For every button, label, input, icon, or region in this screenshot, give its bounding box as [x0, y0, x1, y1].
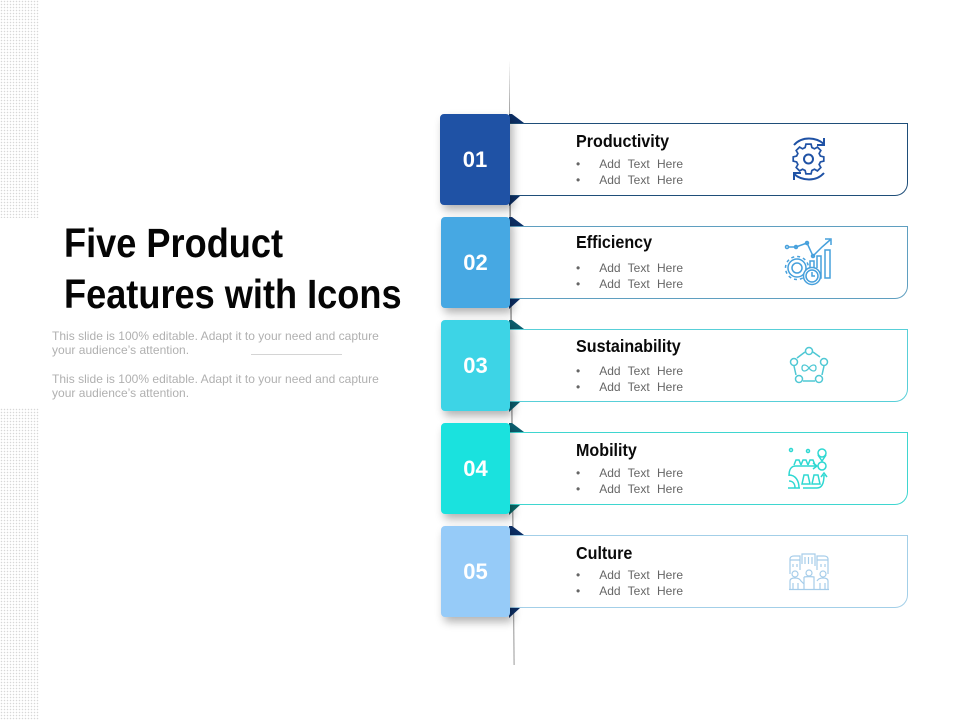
vertical timeline line	[509, 64, 515, 665]
number box 04	[441, 423, 510, 514]
heading: Efficiency: Efficiency	[576, 232, 652, 252]
title: Five Product	[64, 220, 283, 266]
heading: Mobility: Mobility	[576, 440, 637, 460]
number box 05: 05	[463, 559, 488, 584]
heading: Sustainability: Sustainability	[576, 336, 681, 356]
feature row 03	[438, 320, 908, 422]
title: Features with Icons	[64, 271, 402, 317]
bullets 04: • Add Text Here • Add Text Here	[576, 466, 683, 496]
number box 01	[440, 114, 510, 205]
icon: mobility route	[788, 448, 828, 489]
number box 02	[441, 217, 510, 308]
feature row 01	[438, 114, 908, 216]
bullets 05: • Add Text Here • Add Text Here	[576, 568, 683, 598]
icon: infinity cycle	[790, 346, 828, 384]
number box 03	[441, 320, 510, 411]
description text: This slide is 100% editable. Adapt it to your need and capture	[52, 329, 379, 343]
number box 05	[441, 526, 510, 617]
feature row 05	[438, 526, 908, 628]
bullets 03: • Add Text Here • Add Text Here	[576, 364, 683, 394]
bullets 01: • Add Text Here • Add Text Here	[576, 157, 683, 187]
feature row 04	[438, 422, 908, 524]
heading: Productivity: Productivity	[576, 131, 669, 151]
icon: community buildings and people	[789, 553, 829, 590]
description text: This slide is 100% editable. Adapt it to your need and capture	[52, 372, 379, 386]
description text: your audience’s attention.	[52, 343, 189, 357]
description text	[52, 329, 379, 400]
heading: Culture: Culture	[576, 543, 632, 563]
number box 03: 03	[463, 353, 488, 378]
bullets 02: • Add Text Here • Add Text Here	[576, 261, 683, 291]
number box 01: 01	[463, 147, 487, 172]
number box 04: 04	[463, 456, 488, 481]
icon: gear with arrows	[792, 138, 825, 180]
description text: your audience’s attention.	[52, 386, 189, 400]
title	[64, 220, 402, 317]
number box 02: 02	[463, 250, 488, 275]
icon: growth chart with gears	[784, 238, 832, 286]
feature row 02	[438, 216, 908, 318]
